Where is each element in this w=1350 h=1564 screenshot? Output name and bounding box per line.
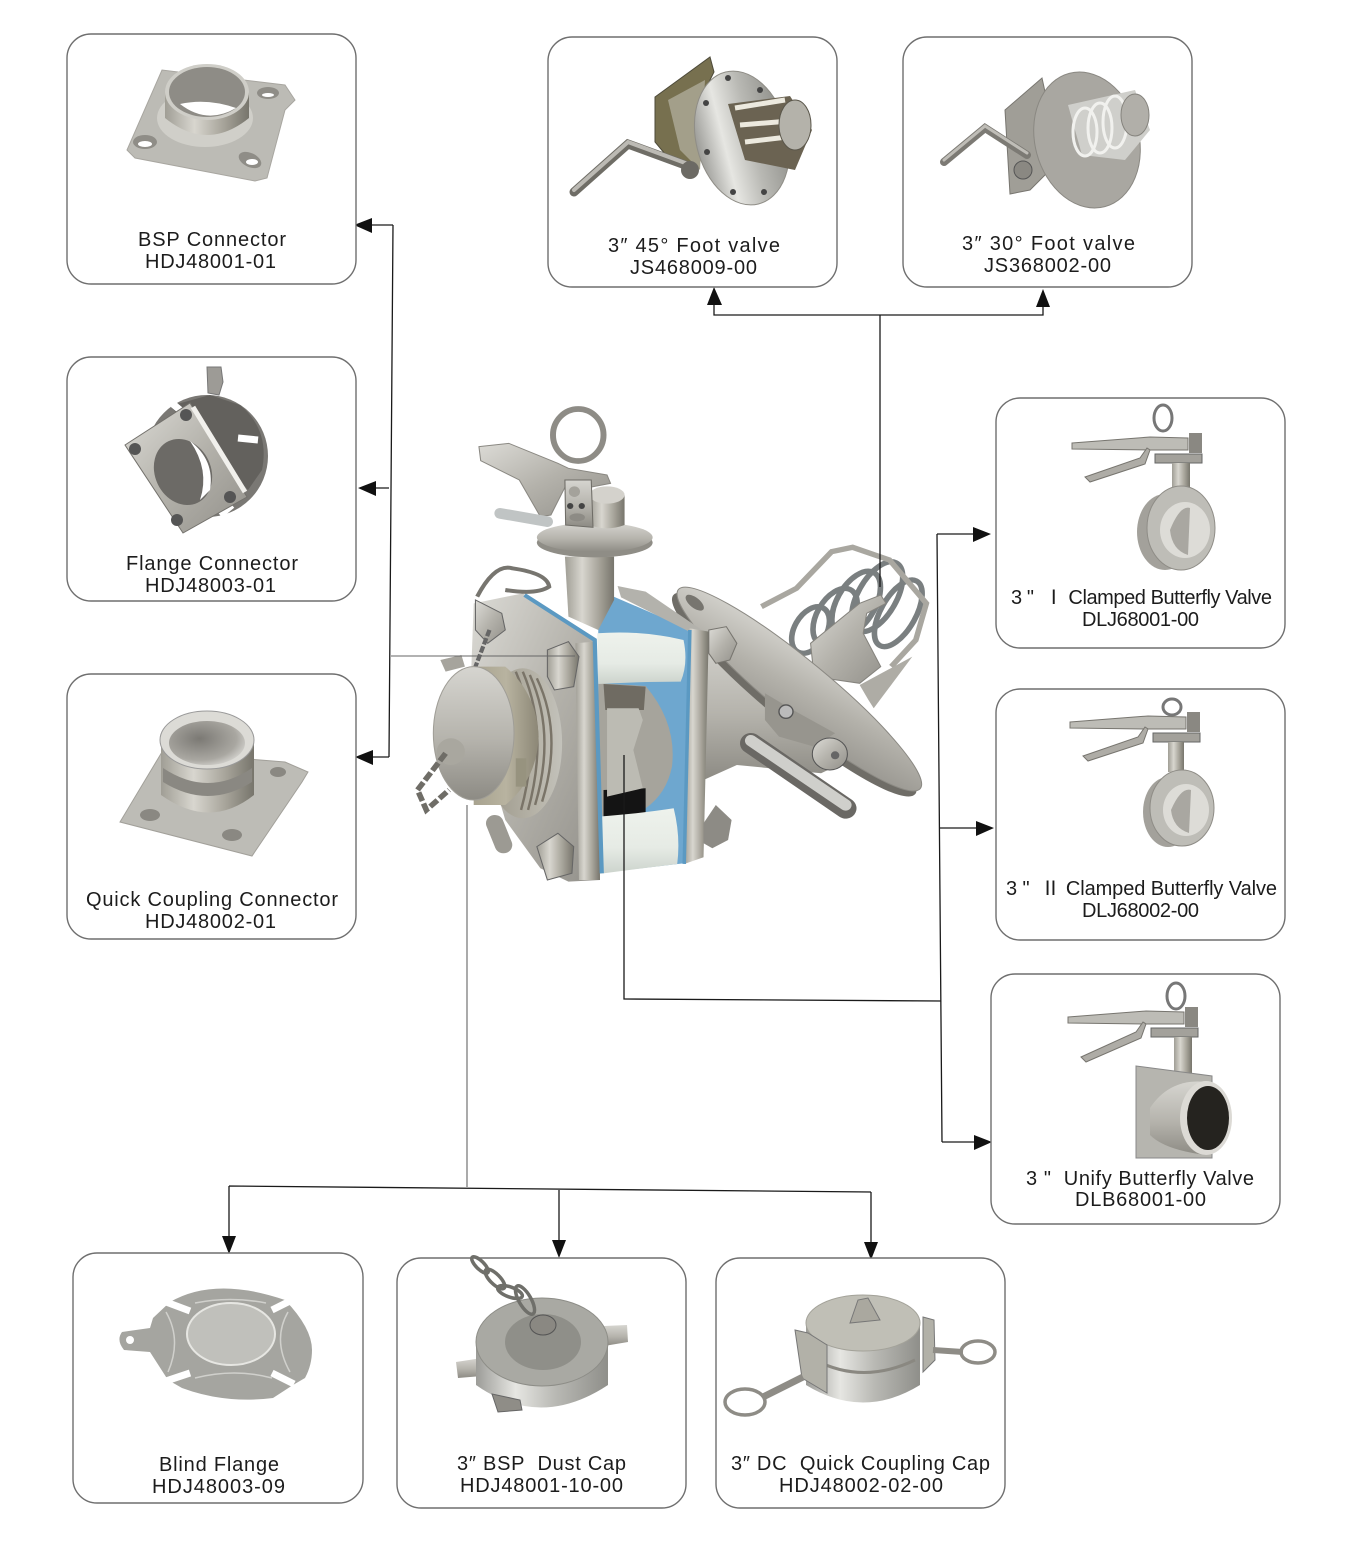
back plate in blue <box>598 590 691 873</box>
label: BSP Connector <box>138 229 286 251</box>
icon: unify butterfly valve <box>1068 983 1232 1158</box>
dark gaps behind hex <box>604 788 646 817</box>
top lever <box>479 443 611 527</box>
icon: type II butterfly valve <box>1070 699 1214 847</box>
icon: BSP dust cap <box>456 1254 628 1412</box>
part number: HDJ48003-01 <box>145 575 276 597</box>
body <box>1137 486 1215 570</box>
angled flange <box>654 568 939 815</box>
part number: JS368002-00 <box>984 255 1111 277</box>
icon: type I butterfly valve <box>1072 405 1215 570</box>
left plate <box>470 593 600 882</box>
dust cap <box>418 655 539 845</box>
panel: BSP connector <box>67 34 356 284</box>
threaded hub <box>484 668 562 818</box>
icon: blind flange <box>119 1288 312 1400</box>
part number: HDJ48001-10-00 <box>460 1475 623 1497</box>
part number: HDJ48003-09 <box>152 1476 285 1498</box>
label: 3 " Ⅰ Clamped Butterfly Valve <box>1011 587 1272 609</box>
white nylon rollers <box>597 632 685 684</box>
icon: 30 degree foot valve <box>944 60 1155 220</box>
panel: blind flange <box>73 1253 363 1503</box>
part number: HDJ48001-01 <box>145 251 276 273</box>
right plate <box>684 628 709 864</box>
panel: unify butterfly valve <box>991 974 1280 1224</box>
pull ring <box>553 409 604 461</box>
chain <box>469 1254 538 1317</box>
label: 3″ 30° Foot valve <box>962 233 1135 255</box>
lever handle and wheel <box>751 693 847 808</box>
lever <box>1070 699 1200 772</box>
icon: flange connector <box>125 367 268 533</box>
top cylinder <box>589 495 625 528</box>
label: 3 " Ⅱ Clamped Butterfly Valve <box>1006 878 1277 900</box>
lever <box>1068 983 1198 1073</box>
top disc <box>537 528 653 557</box>
part number: HDJ48002-01 <box>145 911 276 933</box>
line: left connectors <box>356 225 393 757</box>
hex boss <box>607 708 643 797</box>
stem <box>565 557 614 630</box>
panel: type I clamped butterfly valve <box>996 398 1285 648</box>
label: 3″ BSP Dust Cap <box>457 1453 626 1475</box>
foot valve bracket <box>811 595 886 683</box>
part number: DLJ68001-00 <box>1082 609 1199 631</box>
spring coils <box>784 554 932 659</box>
lever <box>1072 405 1202 493</box>
outlet pipe <box>702 633 870 780</box>
label: Quick Coupling Connector <box>86 889 338 911</box>
part number: DLJ68002-00 <box>1082 900 1199 922</box>
panel: 45 degree foot valve <box>548 37 837 287</box>
panel: DC quick coupling cap <box>716 1258 1005 1508</box>
label: Blind Flange <box>159 1454 279 1476</box>
icon: BSP connector <box>127 64 295 181</box>
mounting plate and outlet <box>1136 1066 1232 1158</box>
foot valve cage <box>761 547 926 667</box>
label: Flange Connector <box>126 553 298 575</box>
label: 3″ 45° Foot valve <box>608 235 780 257</box>
panel: 30 degree foot valve <box>903 37 1192 287</box>
right bolts <box>709 627 737 663</box>
part number: HDJ48002-02-00 <box>779 1475 943 1497</box>
line: butterfly valves <box>624 534 978 1142</box>
icon: DC quick coupling cap <box>725 1295 995 1415</box>
icon: 45 degree foot valve <box>574 57 812 215</box>
part number: DLB68001-00 <box>1075 1189 1206 1211</box>
label: 3 " Unify Butterfly Valve <box>1026 1168 1254 1190</box>
line: caps <box>466 805 468 1187</box>
hex bolts and top chain <box>475 568 579 880</box>
part number: JS468009-00 <box>630 257 757 279</box>
icon: quick coupling connector <box>120 711 308 856</box>
panel: type II clamped butterfly valve <box>996 689 1285 940</box>
panel: BSP dust cap <box>397 1254 686 1508</box>
panel: quick coupling connector <box>67 674 356 939</box>
line: foot valves <box>714 305 1043 587</box>
body <box>1143 770 1214 847</box>
centre disc <box>598 683 673 817</box>
connector lines and arrows <box>222 218 1050 1260</box>
central valve assembly <box>418 409 939 882</box>
panel: flange connector <box>67 357 356 601</box>
label: 3″ DC Quick Coupling Cap <box>731 1453 990 1475</box>
